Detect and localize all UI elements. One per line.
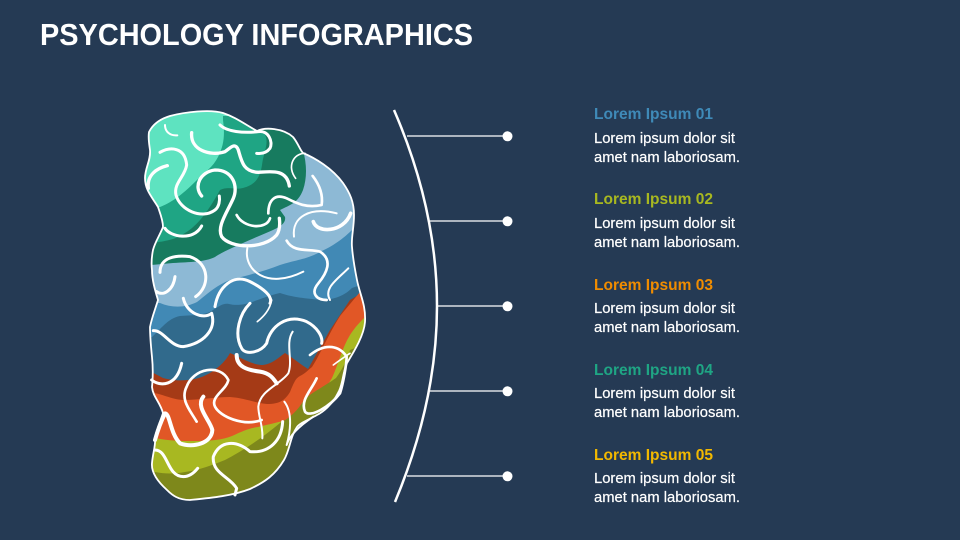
item 2 [594, 191, 740, 251]
item 2: Lorem ipsum dolor sit [594, 216, 735, 232]
item 5: amet nam laboriosam. [594, 490, 740, 506]
connector 2 [430, 216, 512, 226]
connector 3 [437, 301, 512, 311]
item 2: amet nam laboriosam. [594, 235, 740, 251]
connector 4 [430, 386, 512, 396]
item 3: Lorem Ipsum 03 [594, 277, 713, 294]
item 3: amet nam laboriosam. [594, 320, 740, 336]
title: PSYCHOLOGY INFOGRAPHICS [40, 17, 473, 52]
brain folds lower [152, 298, 350, 495]
item 4 [594, 362, 740, 421]
item 1: Lorem Ipsum 01 [594, 106, 713, 123]
item 4: Lorem ipsum dolor sit [594, 386, 735, 402]
arc [394, 110, 437, 502]
curved bracket with connectors [394, 110, 512, 502]
item 4: Lorem Ipsum 04 [594, 362, 713, 379]
item 1 [594, 106, 740, 166]
brain folds upper [148, 125, 351, 307]
item 1: Lorem ipsum dolor sit [594, 131, 735, 147]
brain illustration [140, 100, 375, 510]
item 1: amet nam laboriosam. [594, 150, 740, 166]
brain colored lobes [146, 112, 364, 500]
item 5: Lorem ipsum dolor sit [594, 471, 735, 487]
connector 1 [407, 131, 512, 141]
item 2: Lorem Ipsum 02 [594, 191, 713, 208]
item 3: Lorem ipsum dolor sit [594, 301, 735, 317]
item 5: Lorem Ipsum 05 [594, 447, 713, 464]
item 3 [594, 277, 740, 336]
connector 5 [407, 471, 512, 481]
item 4: amet nam laboriosam. [594, 405, 740, 421]
item 5 [594, 447, 740, 506]
brain outline [145, 111, 365, 500]
